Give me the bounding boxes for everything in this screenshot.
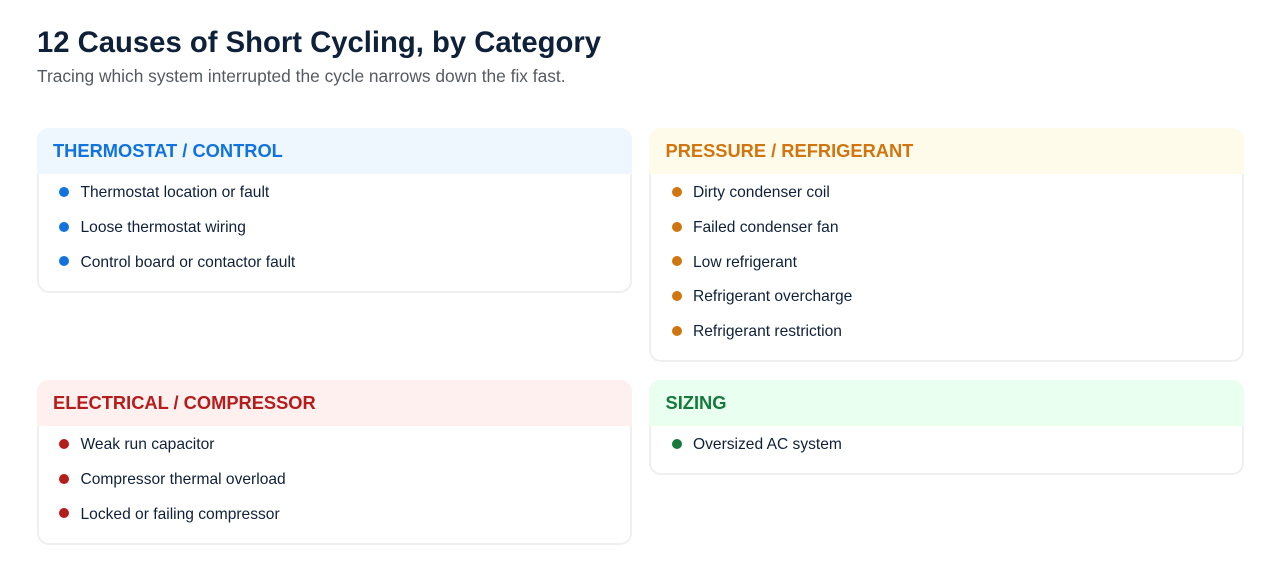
panel: sizing (649, 380, 1244, 475)
list item: weak run capacitor: Weak run capacitor (80, 436, 214, 453)
list item: low refrigerant: Low refrigerant (693, 254, 797, 271)
panel: electrical / compressor (37, 380, 632, 545)
subtitle: Tracing which system interrupted the cycle narrows down the fix fast. (37, 66, 566, 86)
list item: failed condenser fan: Failed condenser fan (693, 219, 838, 236)
heading: thermostat / control (37, 128, 632, 174)
heading: pressure / refrigerant (649, 128, 1244, 174)
list item: locked or failing compressor: Locked or failing compressor (80, 506, 280, 523)
heading: thermostat / control: THERMOSTAT / CONTROL (53, 140, 283, 161)
panel: pressure / refrigerant (649, 128, 1244, 362)
list item: control board or contactor fault: Control board or contactor fault (80, 254, 295, 271)
list item: dirty condenser coil: Dirty condenser coil (693, 184, 830, 201)
heading: pressure / refrigerant: PRESSURE / REFRIGERANT (666, 140, 913, 161)
heading: sizing (649, 380, 1244, 426)
list item: oversized ac system: Oversized AC system (693, 436, 842, 453)
list item: thermostat location or fault: Thermostat location or fault (80, 184, 269, 201)
heading: sizing: SIZING (666, 392, 726, 413)
list item: refrigerant overcharge: Refrigerant overcharge (693, 288, 852, 305)
heading: electrical / compressor (37, 380, 632, 426)
list item: compressor thermal overload: Compressor thermal overload (80, 471, 286, 488)
panel: thermostat / control (37, 128, 632, 293)
list item: loose thermostat wiring: Loose thermostat wiring (80, 219, 246, 236)
list item: refrigerant restriction: Refrigerant restriction (693, 323, 842, 340)
title: 12 Causes of Short Cycling, by Category (37, 27, 601, 59)
heading: electrical / compressor: ELECTRICAL / COMPRESSOR (53, 392, 316, 413)
